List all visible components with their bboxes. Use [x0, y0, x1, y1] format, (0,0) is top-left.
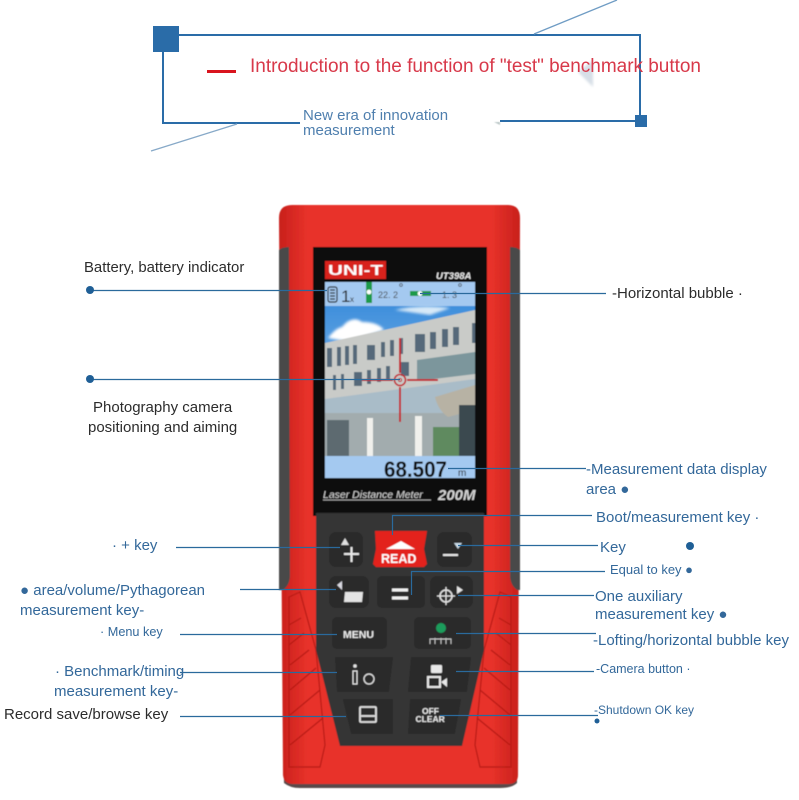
- product caption: Laser Distance Meter: [323, 489, 423, 501]
- key: lofting: [414, 617, 471, 649]
- labels left: Photography camera: [93, 399, 233, 416]
- subtitle: New era of innovation: [303, 107, 448, 124]
- labels keys left: Record save/browse key: [4, 706, 169, 723]
- side grips: [289, 592, 511, 767]
- labels right: One auxiliary: [595, 588, 683, 605]
- keypad: [316, 513, 484, 746]
- subtitle: measurement: [303, 122, 396, 139]
- header frame: [151, 0, 647, 151]
- labels right: -Measurement data display: [586, 461, 767, 478]
- lcd status bar: x: [350, 295, 354, 304]
- lcd screen: [325, 282, 475, 482]
- labels keys left: · + key: [112, 537, 158, 554]
- labels keys left: measurement key-: [54, 683, 178, 700]
- key: plus: [329, 532, 363, 567]
- labels left: [84, 260, 244, 436]
- labels right: Boot/measurement key ·: [596, 509, 759, 526]
- leader lines: [90, 290, 606, 716]
- labels keys left: · Benchmark/timing: [55, 663, 184, 680]
- brand logo: [325, 261, 386, 279]
- labels right: [586, 285, 789, 717]
- key: menu: [332, 617, 387, 649]
- key: off clear: CLEAR: [416, 714, 445, 724]
- lcd status bar: 1: [341, 287, 350, 306]
- lcd status bar: [328, 282, 461, 306]
- crosshair: [362, 338, 438, 422]
- labels right: -Horizontal bubble ·: [612, 285, 743, 302]
- key: menu: MENU: [343, 629, 374, 641]
- labels keys left: measurement key-: [20, 602, 144, 619]
- labels right: Equal to key ●: [610, 562, 693, 577]
- lcd status bar: 1. 3: [442, 290, 457, 300]
- product caption: 200M: [437, 487, 476, 504]
- lcd reading: [325, 456, 475, 482]
- labels left: Battery, battery indicator: [84, 260, 244, 276]
- key: off clear: OFF: [422, 706, 439, 716]
- product caption: [323, 487, 476, 504]
- labels right: area ●: [586, 481, 629, 498]
- key: benchmark timing: [336, 658, 392, 691]
- lcd status bar: 22. 2: [378, 290, 398, 300]
- key: save: [344, 700, 392, 733]
- device: laser distance meter: [279, 205, 520, 788]
- labels keys left: ● area/volume/Pythagorean: [20, 582, 205, 599]
- key: equal: [377, 576, 425, 608]
- lcd reading: 68.507: [384, 457, 447, 482]
- labels keys left: · Menu key: [100, 625, 163, 639]
- lcd camera photo: [325, 306, 475, 456]
- leader dots: [86, 286, 694, 724]
- labels left: positioning and aiming: [88, 419, 237, 436]
- labels right: Key: [600, 539, 626, 556]
- device body: [279, 205, 520, 788]
- labels right: -Camera button ·: [596, 662, 690, 676]
- key: camera: [409, 658, 470, 691]
- brand logo: UNI-T: [328, 263, 383, 279]
- title: Introduction to the function of "test" benchmark button: [250, 56, 701, 77]
- labels keys left: [4, 537, 205, 723]
- key: READ: READ: [381, 552, 416, 566]
- key: minus: [437, 532, 472, 567]
- key: area volume: [329, 576, 369, 608]
- labels right: -Lofting/horizontal bubble key: [593, 632, 789, 649]
- header red dash: [207, 70, 236, 73]
- labels right: measurement key ●: [595, 606, 727, 623]
- model name: UT398A: [436, 271, 472, 282]
- key: target: [430, 576, 473, 608]
- key: off clear: [409, 700, 460, 733]
- key: READ: [373, 531, 427, 567]
- labels right: -Shutdown OK key: [594, 703, 694, 717]
- lcd reading: m: [458, 468, 466, 479]
